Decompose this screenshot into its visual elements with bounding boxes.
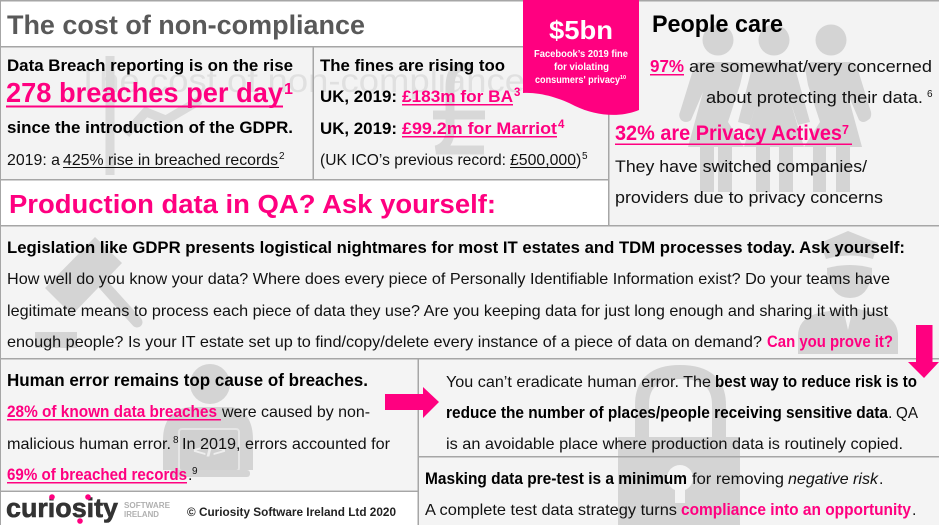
- text block: masking data: Masking data pre-test is a minimum: [425, 470, 687, 488]
- text block: legislation questions: enough people? Is your IT estate set up to find/copy/delete every instance of a piece of data on demand?: [7, 334, 762, 351]
- text block: legislation questions: Can you prove it?: [767, 333, 893, 351]
- logo: Curiosity Software Ireland: SOFTWARE: [124, 501, 171, 510]
- text: Marriot fine: [320, 119, 565, 138]
- watermark: ghost title: The cost of non-compliance: [77, 62, 525, 99]
- text: rise in breached records: 2019: a: [7, 152, 60, 169]
- text: BA fine: UK, 2019:: [320, 88, 397, 106]
- text: Marriot fine: UK, 2019:: [320, 120, 397, 138]
- statistic: 97 percent concerned: 6: [927, 89, 933, 100]
- callout: Facebook fine: 10: [620, 75, 626, 81]
- panel: legislation background: [0, 226, 939, 358]
- text: BA fine: [320, 87, 520, 106]
- panel: breach statistics background: [0, 47, 608, 179]
- text: known data breaches: were caused by non-: [221, 404, 370, 421]
- panel: data breach reporting: [6, 57, 293, 169]
- icon: padlock watermark: [618, 372, 740, 525]
- text block: reduce risk: best way to reduce risk is to: [715, 373, 917, 391]
- text: switched providers: [615, 157, 883, 207]
- text: Marriot fine: 4: [558, 119, 565, 131]
- text: since GDPR: since the introduction of the GDPR.: [7, 119, 293, 137]
- panel: fines: [320, 57, 588, 169]
- statistic: 97 percent concerned: 97%: [650, 56, 684, 76]
- panel: people care background: [609, 1, 939, 225]
- logo: Curiosity Software Ireland: IRELAND: [124, 510, 159, 519]
- text: previous record: ): [576, 152, 581, 169]
- text: malicious human error: malicious human error.: [7, 436, 171, 453]
- text: malicious human error: In 2019, errors accounted for: [182, 436, 391, 453]
- heading: The fines are rising too: [320, 57, 505, 75]
- text: BA fine: £183m for BA: [402, 88, 513, 106]
- text: previous record: 5: [582, 151, 588, 162]
- callout: Facebook fine: consumers' privacy: [535, 75, 621, 86]
- text: breached records: 69% of breached records: [7, 466, 187, 484]
- text: malicious human error: 8: [173, 435, 179, 446]
- text: rise in breached records: 2: [279, 151, 285, 162]
- icon: rising chart watermark: [110, 56, 200, 175]
- heading: Human error remains top cause of breaches.: [7, 370, 368, 390]
- logo: Curiosity Software Ireland: [6, 493, 171, 524]
- text block: masking data: compliance into an opportunity: [681, 501, 912, 519]
- logo: Curiosity Software Ireland: curiosity: [6, 493, 118, 523]
- icon: person with laptop watermark: </>: [193, 441, 226, 460]
- panel: reduce risk background: [419, 359, 939, 525]
- text block: legislation questions: How well do you know your data? Where does every piece of Personally Identifiable Information exist? Do your teams have: [7, 271, 890, 288]
- copyright: © Curiosity Software Ireland Ltd 2020: [187, 507, 396, 519]
- statistic: breaches per day: 1: [284, 81, 293, 98]
- title: The cost of non-compliance: [7, 10, 365, 40]
- text block: reduce risk: You can’t eradicate human error. The: [446, 374, 711, 391]
- callout: Facebook fine: for violating: [554, 62, 609, 73]
- text: malicious human error: [7, 435, 391, 453]
- icon: person with laptop watermark: [163, 364, 253, 477]
- statistic: privacy actives: 7: [842, 123, 849, 137]
- text: BA fine: 3: [514, 87, 520, 99]
- text: breached records: .: [188, 467, 192, 484]
- text block: reduce risk: is an avoidable place where production data is routinely copied.: [446, 436, 903, 453]
- callout: Facebook fine: [523, 0, 639, 115]
- arrow: down: [908, 325, 939, 378]
- text: previous record: [320, 151, 588, 169]
- text block: reduce risk: .: [888, 405, 892, 422]
- panel: human error background: [0, 359, 418, 490]
- heading: Data Breach reporting is on the rise: [7, 57, 293, 75]
- panel: people care: [615, 11, 933, 207]
- statistic: 97 percent concerned: about protecting their data.: [706, 88, 923, 107]
- panel: human error: [7, 370, 391, 484]
- callout: Facebook fine: $5bn: [549, 15, 613, 45]
- heading: production data: Production data in QA? Ask yourself:: [9, 191, 496, 219]
- text: known data breaches: [7, 403, 370, 421]
- text block: masking data: negative risk: [788, 471, 879, 488]
- statistic: breaches per day: 278 breaches per day: [6, 77, 283, 108]
- text: previous record: £500,000: [510, 152, 576, 169]
- text: breached records: 9: [192, 466, 198, 477]
- text block: legislation questions: Legislation like GDPR presents logistical nightmares for most IT estates and TDM processes today. Ask yourself:: [7, 239, 905, 257]
- text: rise in breached records: 425% rise in breached records: [63, 152, 278, 169]
- text: known data breaches: 28% of known data breaches: [7, 403, 217, 421]
- text block: masking data: .: [879, 471, 883, 488]
- text: switched providers: providers due to privacy concerns: [615, 188, 883, 207]
- text block: masking data: .: [912, 502, 916, 519]
- icon: gavel watermark: [35, 237, 137, 348]
- text block: legislation questions: legitimate means to process each piece of data they use? Are you keeping data for just long enough and sharing it with just: [7, 303, 889, 320]
- text block: reduce risk: reduce the number of places/people receiving sensitive data: [446, 404, 889, 422]
- icon: officer watermark: [798, 231, 898, 354]
- text block: legislation questions: [7, 239, 905, 351]
- statistic: privacy actives: 32% are Privacy Actives: [615, 122, 842, 145]
- text block: reduce risk: QA: [896, 405, 918, 422]
- text: Marriot fine: £99.2m for Marriot: [402, 120, 558, 138]
- text block: masking data: [425, 470, 916, 519]
- arrow: right: [385, 387, 439, 418]
- heading: People care: [652, 11, 783, 38]
- statistic: 97 percent concerned: are somewhat/very concerned: [689, 57, 932, 76]
- text block: reduce risk: [446, 373, 918, 453]
- callout: Facebook fine: Facebook’s 2019 fine: [534, 49, 629, 60]
- icon: pound sign watermark: [433, 67, 485, 150]
- icon: three people watermark: [679, 24, 871, 192]
- text block: masking data: A complete test data strategy turns: [425, 502, 677, 519]
- text: switched providers: They have switched companies/: [615, 157, 867, 176]
- statistic: 97 percent concerned: [650, 56, 933, 107]
- text: previous record: (UK ICO’s previous record:: [320, 152, 506, 169]
- text block: masking data: for removing: [692, 471, 784, 488]
